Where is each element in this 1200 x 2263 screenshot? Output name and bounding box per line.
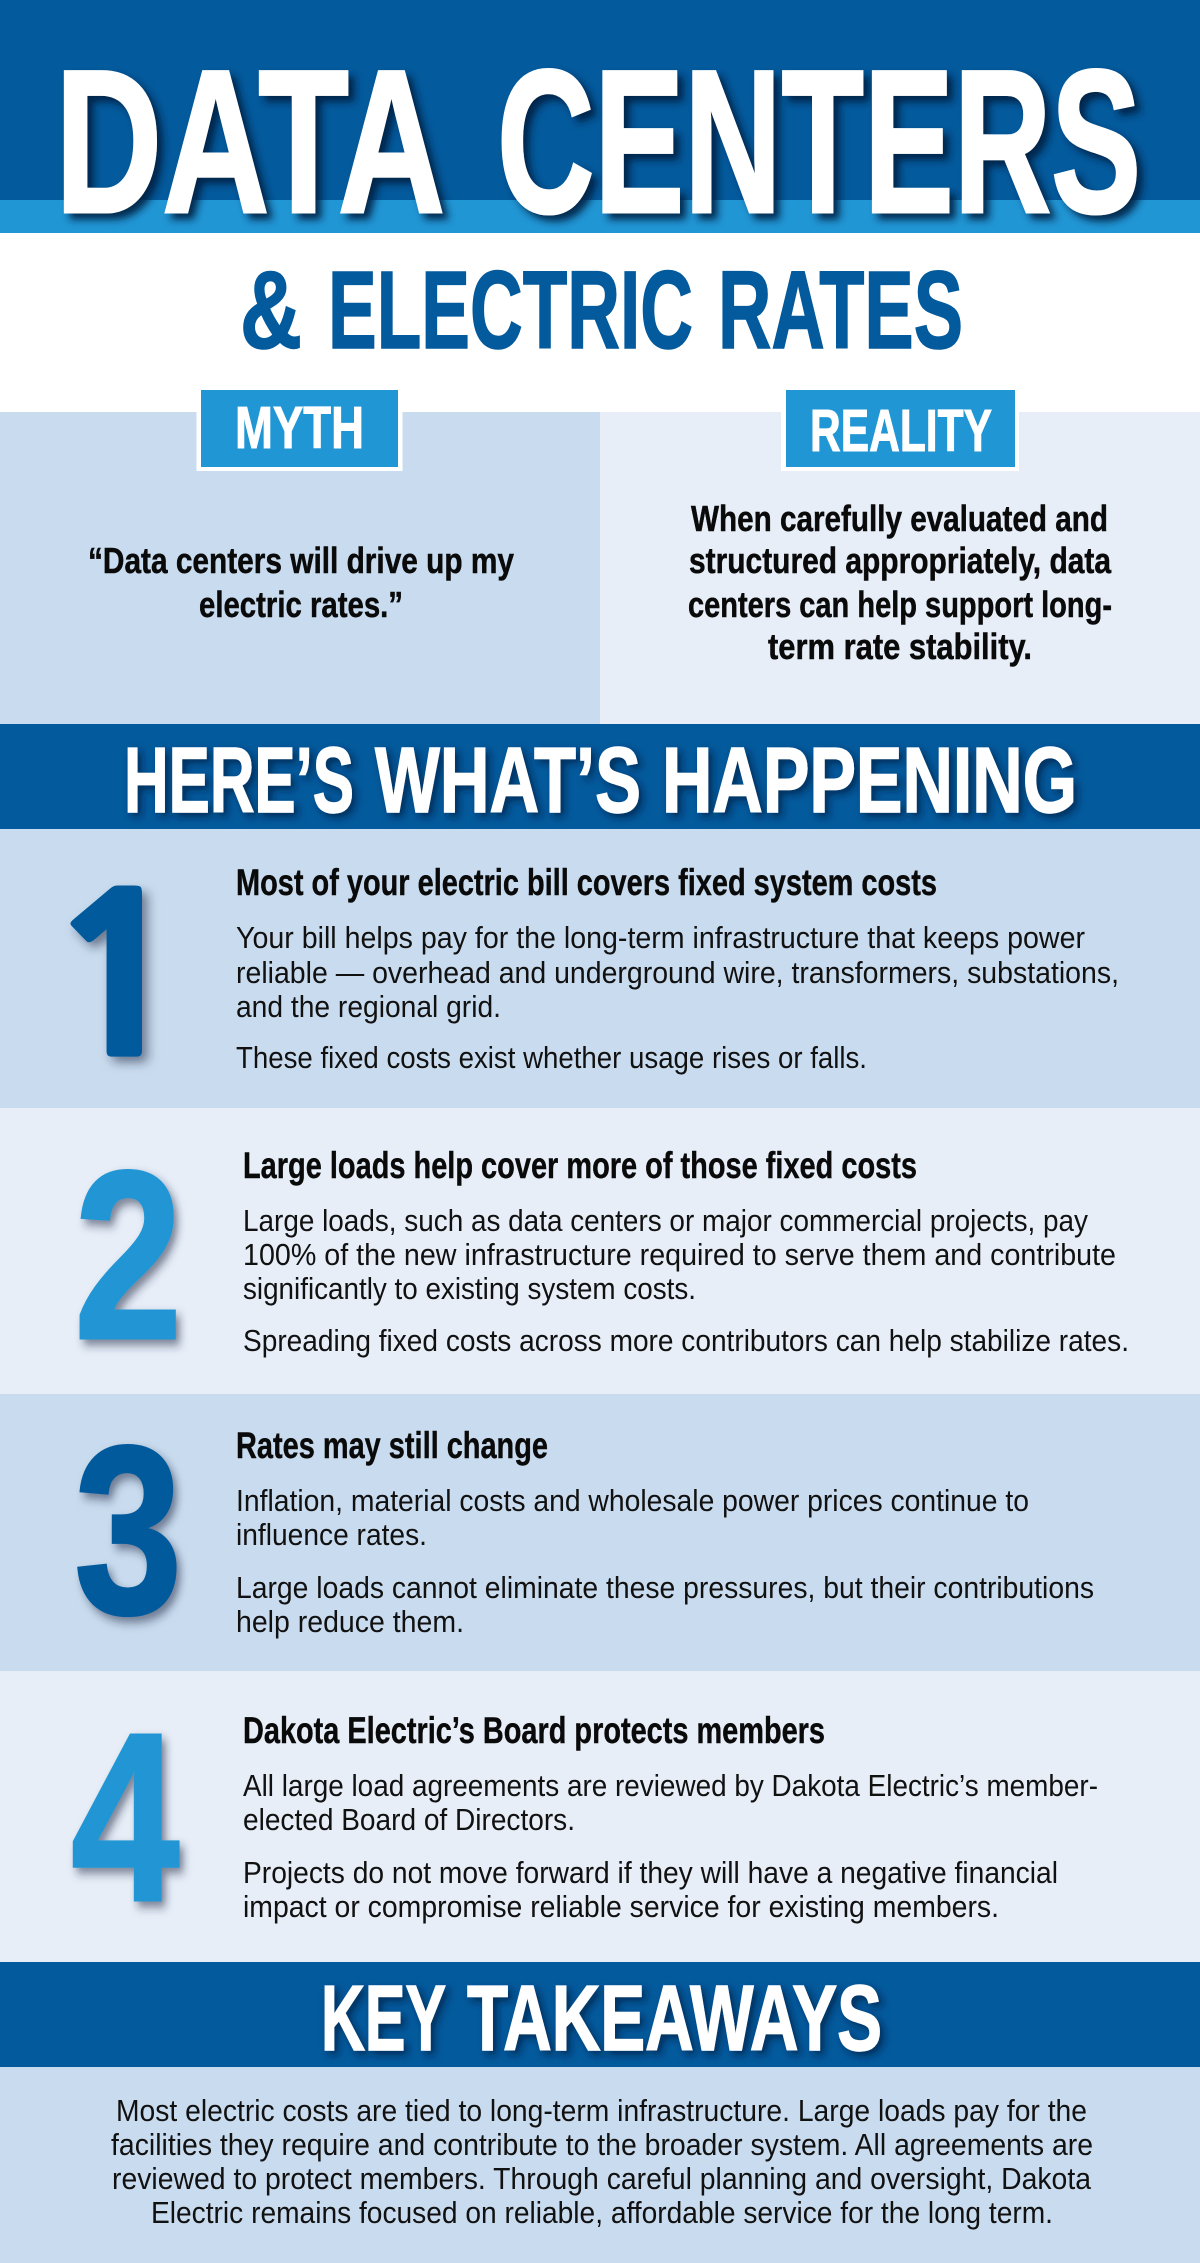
panel: key takeaways text: reviewed to protect members. Through careful planning and oversight, Dakota [112, 2162, 1091, 2196]
number 3: 3 [74, 1397, 182, 1665]
section banner: key takeaways [0, 1962, 1200, 2070]
step 2 body: significantly to existing system costs. [243, 1272, 696, 1306]
panel: reality [600, 387, 1200, 724]
step 1 body [236, 921, 1119, 1075]
step 3 heading: Rates may still change [236, 1425, 548, 1466]
subtitle: electric rates: & [240, 249, 302, 372]
step 2 body [243, 1204, 1129, 1358]
reality badge [781, 387, 1019, 471]
step 1 body: These fixed costs exist whether usage rises or falls. [236, 1041, 867, 1075]
step 2 body: Spreading fixed costs across more contributors can help stabilize rates. [243, 1324, 1129, 1358]
title: data centers: DATA [55, 28, 445, 256]
section banner: here's what's happening: HERE’S [124, 728, 354, 832]
myth quote [88, 540, 515, 625]
title: data centers [55, 28, 1141, 256]
myth quote: “Data centers will drive up my [88, 540, 515, 581]
reality statement [688, 498, 1112, 667]
panel: myth [0, 387, 600, 724]
step 4 heading: Dakota Electric’s Board protects members [243, 1710, 825, 1751]
step 1 heading: Most of your electric bill covers fixed system costs [236, 862, 937, 903]
section banner: here's what's happening: WHAT’S [375, 728, 641, 832]
step 4 body: Projects do not move forward if they will have a negative financial [243, 1856, 1058, 1890]
step 4 body [243, 1769, 1098, 1924]
number 1: 1 [46, 869, 193, 1087]
section banner: key takeaways: KEY [321, 1966, 446, 2070]
panel: step 4 [0, 1671, 1200, 1962]
myth badge [196, 387, 402, 471]
step 3 body: Large loads cannot eliminate these pressures, but their contributions [236, 1571, 1094, 1605]
step 3 body [236, 1484, 1094, 1639]
panel: key takeaways text [0, 2067, 1200, 2263]
section banner: key takeaways: TAKEAWAYS [467, 1966, 882, 2070]
reality statement: term rate stability. [768, 626, 1032, 667]
step 3 body: influence rates. [236, 1518, 427, 1552]
reality statement: When carefully evaluated and [691, 498, 1108, 539]
step 2 body: Large loads, such as data centers or major commercial projects, pay [243, 1204, 1089, 1238]
number 4: 4 [71, 1684, 179, 1952]
step 3 body: help reduce them. [236, 1605, 464, 1639]
panel: step 1 [0, 829, 1200, 1108]
subtitle: electric rates: ELECTRIC [328, 249, 693, 372]
step 4 body: elected Board of Directors. [243, 1803, 575, 1837]
reality statement: structured appropriately, data [689, 540, 1112, 581]
step 1 body: Your bill helps pay for the long-term infrastructure that keeps power [236, 921, 1085, 955]
subtitle: electric rates: RATES [718, 249, 963, 372]
myth badge: MYTH [235, 395, 364, 461]
step 1 body: and the regional grid. [236, 990, 501, 1024]
panel: key takeaways text: facilities they require and contribute to the broader system. All agreements are [111, 2128, 1093, 2162]
section banner: here's what's happening: HAPPENING [662, 728, 1077, 832]
section banner: here's what's happening [0, 724, 1200, 832]
panel: step 2 [0, 1108, 1200, 1394]
reality badge: REALITY [810, 398, 992, 464]
step 3 body: Inflation, material costs and wholesale power prices continue to [236, 1484, 1029, 1518]
myth quote: electric rates.” [199, 584, 403, 625]
step 4 body: All large load agreements are reviewed by Dakota Electric’s member- [243, 1769, 1098, 1803]
step 4 body: impact or compromise reliable service for existing members. [243, 1890, 999, 1924]
step 1 body: reliable — overhead and underground wire, transformers, substations, [236, 956, 1119, 990]
number 2: 2 [74, 1122, 182, 1390]
panel: step 3 [0, 1394, 1200, 1671]
panel: key takeaways text: Most electric costs are tied to long-term infrastructure. Large loads pay for the [116, 2094, 1087, 2128]
step 2 body: 100% of the new infrastructure required to serve them and contribute [243, 1238, 1116, 1272]
panel: key takeaways text: Electric remains focused on reliable, affordable service for the long term. [151, 2196, 1053, 2230]
header band [0, 0, 1200, 233]
step 2 heading: Large loads help cover more of those fixed costs [243, 1145, 917, 1186]
